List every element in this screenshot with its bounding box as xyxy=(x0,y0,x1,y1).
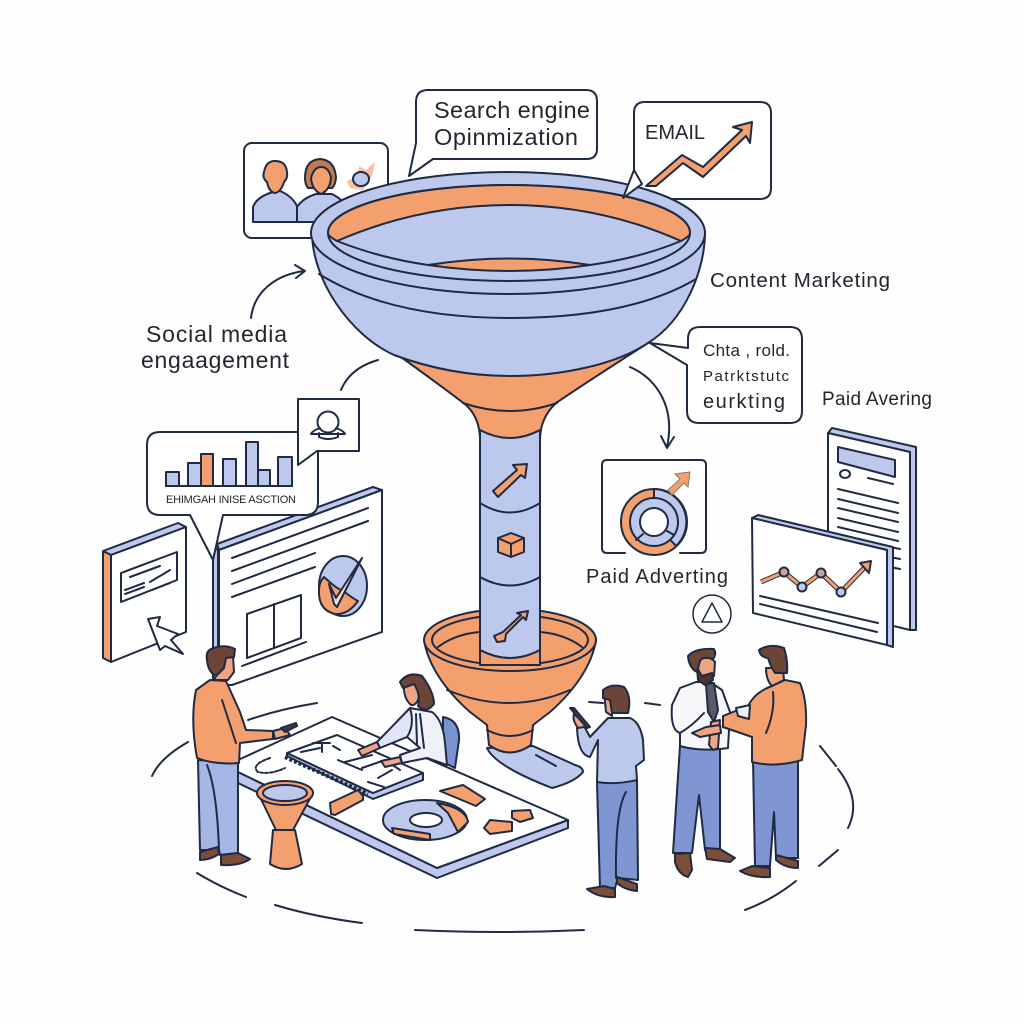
desk block xyxy=(330,790,363,815)
stem base strip xyxy=(480,650,540,665)
stem xyxy=(480,430,540,665)
callout: bar chart bubble xyxy=(147,432,318,560)
card text block xyxy=(121,552,177,602)
funnel cone xyxy=(394,343,648,440)
person: man in orange right xyxy=(723,646,806,877)
bar chart xyxy=(166,442,292,486)
person: woman at desk xyxy=(358,674,459,768)
panel: presentation board xyxy=(213,487,382,690)
panel: line chart card xyxy=(752,515,893,647)
desk pieces xyxy=(440,785,485,806)
wire xyxy=(256,758,285,773)
desk xyxy=(238,717,568,878)
callout: content marketing box: Chta , rold. xyxy=(703,341,790,360)
panel: audience profiles xyxy=(244,143,388,238)
label: social media engagement xyxy=(141,321,290,373)
callout: search engine optimization xyxy=(409,90,597,176)
callout: search engine optimization: Search engine xyxy=(434,97,590,123)
lower funnel xyxy=(424,609,596,788)
icon: rising arrow xyxy=(646,122,752,186)
label: paid adverting: Paid Adverting xyxy=(586,566,728,588)
icon: glasses badge xyxy=(347,162,375,190)
lower funnel body xyxy=(424,640,596,752)
arrow: to paid advertising xyxy=(630,367,674,448)
icon: person one xyxy=(253,161,297,222)
callout: content marketing box: Patrktstutc xyxy=(703,368,790,385)
arrow: funnel to chart xyxy=(341,360,378,390)
dashed ground ring xyxy=(152,702,853,932)
callout: search engine optimization: Opinmization xyxy=(434,124,578,150)
icon: person outline xyxy=(311,412,345,439)
person: man in orange left xyxy=(193,646,297,865)
document header block xyxy=(838,447,895,477)
callout: bar chart bubble: EHIMGAH INISE ASCTION xyxy=(166,494,296,506)
small funnel xyxy=(257,781,313,869)
top funnel xyxy=(311,172,705,440)
donut model xyxy=(383,800,468,840)
callout: email box: EMAIL xyxy=(645,122,705,144)
callout: email box xyxy=(634,102,771,199)
icon: donut chart xyxy=(621,489,687,555)
icon: triangle badge xyxy=(693,595,731,633)
person: bearded man xyxy=(672,649,735,877)
icon: stem double arrow xyxy=(494,611,528,642)
callout: profile icon box xyxy=(298,399,359,465)
panel: left card with cursor xyxy=(103,523,186,662)
label: content marketing: Content Marketing xyxy=(710,269,890,292)
icon: cursor xyxy=(148,617,183,654)
laptop xyxy=(285,735,423,799)
icon: cube xyxy=(498,533,524,557)
label: paid avering: Paid Avering xyxy=(822,389,932,410)
icon: growth arrow xyxy=(668,472,690,495)
label: social media engagement: engaagement xyxy=(141,347,290,373)
line chart xyxy=(761,561,871,596)
funnel interior xyxy=(328,185,690,281)
person: man with phone xyxy=(570,686,644,897)
panel: paid advertising donut xyxy=(602,460,706,555)
callout: content marketing box xyxy=(650,327,802,423)
funnel interior lens xyxy=(428,258,590,271)
lower funnel rim xyxy=(424,609,596,671)
email callout pointer xyxy=(623,170,642,198)
callout: content marketing box: eurkting xyxy=(703,391,785,413)
wireframe block xyxy=(247,595,301,658)
icon: stem arrow up xyxy=(493,464,527,497)
panel: report document xyxy=(828,428,916,630)
lower funnel base xyxy=(487,746,583,788)
funnel bowl xyxy=(312,232,705,376)
label: social media engagement: Social media xyxy=(146,321,287,347)
funnel rim xyxy=(311,172,705,294)
arrow: social to funnel xyxy=(251,265,305,318)
icon: pie with check xyxy=(319,556,367,616)
icon: person two xyxy=(297,159,345,222)
